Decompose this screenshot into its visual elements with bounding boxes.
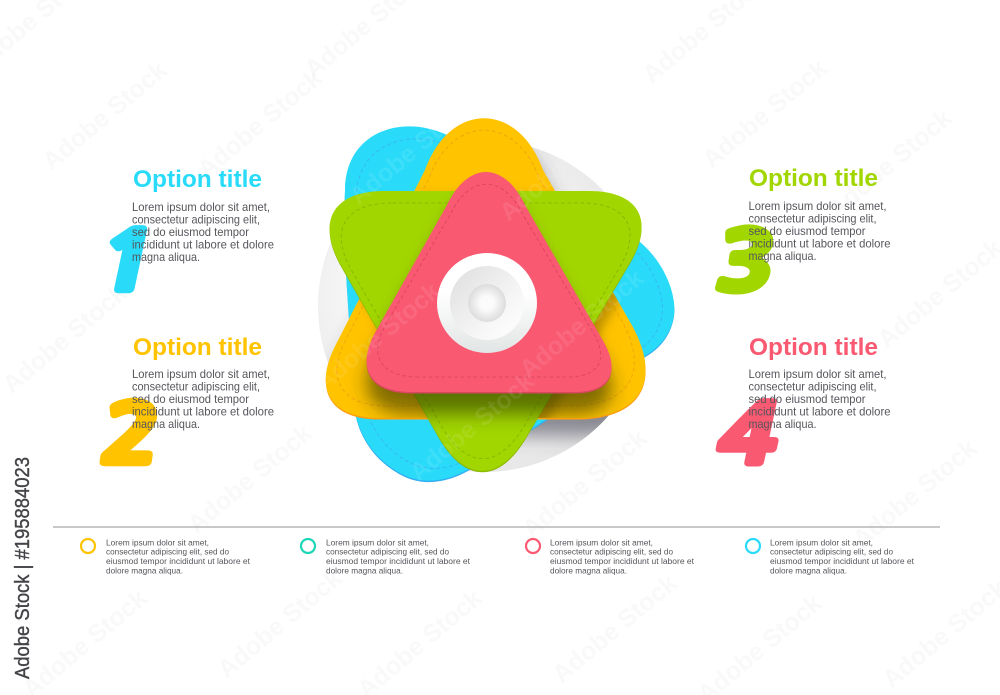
watermark over graphic: Adobe Stock: [494, 107, 629, 227]
watermark pattern: Adobe Stock: [0, 279, 132, 399]
footer text 3: Lorem ipsum dolor sit amet,: [550, 537, 653, 547]
footer item 3: [526, 537, 695, 576]
footer text 1: consectetur adipiscing elit, sed do: [106, 547, 229, 557]
description 4: sed do eiusmod tempor: [748, 393, 866, 406]
footer text 4: Lorem ipsum dolor sit amet,: [770, 537, 873, 547]
watermark over graphic: Adobe Stock: [404, 367, 539, 487]
watermark pattern: Adobe Stock: [212, 564, 347, 684]
central layered triangle graphic: [310, 91, 674, 487]
title 4: Option title: [749, 334, 878, 361]
footer item 4: [746, 537, 915, 576]
watermark pattern: Adobe Stock: [517, 424, 652, 544]
description 3: sed do eiusmod tempor: [748, 225, 866, 238]
description 4: incididunt ut labore et dolore: [748, 406, 890, 418]
description 2: consectetur adipiscing elit,: [132, 380, 260, 394]
centre white button: [437, 253, 537, 353]
description 2: magna aliqua.: [132, 418, 200, 431]
title 3: Option title: [749, 165, 878, 192]
description 3: magna aliqua.: [748, 250, 816, 263]
footer text 1: dolore magna aliqua.: [106, 566, 183, 576]
description 4: Lorem ipsum dolor sit amet,: [748, 368, 886, 381]
description 2: Lorem ipsum dolor sit amet,: [132, 368, 270, 381]
description 4: magna aliqua.: [748, 418, 816, 431]
footer text 4: consectetur adipiscing elit, sed do: [770, 547, 893, 557]
description 3: incididunt ut labore et dolore: [748, 238, 890, 250]
watermark pattern: Adobe Stock: [192, 64, 327, 184]
numeral 1: 1: [91, 222, 166, 302]
icon: pink ring: [526, 539, 540, 553]
icon: teal ring: [301, 539, 315, 553]
description 1: incididunt ut labore et dolore: [132, 238, 274, 252]
footer item 2: [301, 537, 471, 576]
numeral 3: 3: [711, 221, 781, 302]
green inverted rounded triangle: [330, 191, 642, 472]
description 1: consectetur adipiscing elit,: [132, 214, 260, 226]
watermark pattern: Adobe Stock: [847, 434, 982, 554]
description 4: [748, 368, 890, 431]
description 4: consectetur adipiscing elit,: [748, 380, 876, 394]
footer text 2: consectetur adipiscing elit, sed do: [326, 547, 449, 557]
option 1: [91, 166, 274, 302]
footer text 2: dolore magna aliqua.: [326, 566, 403, 576]
footer text 1: [106, 537, 251, 576]
option 4: [712, 334, 890, 475]
description 3: Lorem ipsum dolor sit amet,: [748, 200, 886, 213]
description 1: magna aliqua.: [132, 251, 200, 264]
footer item 1: [81, 537, 251, 576]
footer text 4: dolore magna aliqua.: [770, 566, 847, 576]
option 2: [96, 334, 274, 475]
footer text 1: Lorem ipsum dolor sit amet,: [106, 537, 209, 547]
title 2: Option title: [133, 334, 262, 361]
watermark over graphic: Adobe Stock: [514, 264, 649, 384]
vertical stock id text: Adobe Stock | #195884023: [12, 457, 34, 679]
icon: blue ring: [746, 539, 760, 553]
footer text 3: [550, 537, 695, 576]
footer text 2: [326, 537, 471, 576]
watermark pattern: Adobe Stock: [547, 569, 682, 689]
watermark over graphic: Adobe Stock: [344, 91, 479, 211]
description 1: sed do eiusmod tempor: [132, 226, 249, 239]
watermark pattern: Adobe Stock: [697, 54, 832, 174]
title 1: Option title: [133, 166, 262, 193]
description 1: [132, 201, 274, 264]
description 3: consectetur adipiscing elit,: [748, 212, 876, 226]
footer text 3: consectetur adipiscing elit, sed do: [550, 547, 673, 557]
blue rounded shape: [344, 126, 674, 482]
watermark pattern: Adobe Stock: [182, 419, 317, 539]
icon: yellow ring: [81, 539, 95, 553]
footer text 4: [770, 537, 915, 576]
pink rounded triangle: [367, 172, 612, 394]
grey background disc: [318, 147, 608, 472]
numeral 4: 4: [712, 395, 787, 475]
option 3: [711, 165, 890, 302]
pink triangle shadow: [367, 194, 612, 414]
watermark pattern: Adobe Stock: [822, 104, 957, 224]
footer text 1: eiusmod tempor incididunt ut labore et: [106, 556, 251, 566]
footer text 3: eiusmod tempor incididunt ut labore et: [550, 556, 695, 566]
description 2: sed do eiusmod tempor: [132, 393, 249, 406]
footer text 2: eiusmod tempor incididunt ut labore et: [326, 556, 471, 566]
watermark over graphic: [310, 91, 649, 487]
numeral 2: 2: [96, 394, 166, 475]
watermark pattern: Adobe Stock: [37, 56, 172, 176]
footer text 2: Lorem ipsum dolor sit amet,: [326, 537, 429, 547]
description 1: Lorem ipsum dolor sit amet,: [132, 201, 270, 214]
description 2: [132, 368, 274, 431]
watermark over graphic: Adobe Stock: [310, 277, 445, 397]
description 2: incididunt ut labore et dolore: [132, 406, 274, 418]
footer text 3: dolore magna aliqua.: [550, 566, 627, 576]
yellow rounded triangle: [326, 118, 646, 420]
description 3: [748, 200, 890, 263]
footer text 4: eiusmod tempor incididunt ut labore et: [770, 556, 915, 566]
